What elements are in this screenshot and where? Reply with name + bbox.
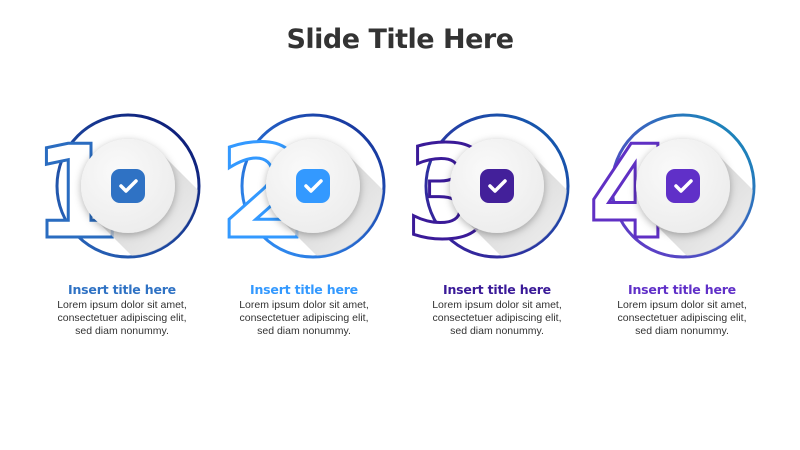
- item 2 graphic: 2: [219, 119, 308, 268]
- caption 2: consectetuer adipiscing elit,: [240, 312, 368, 324]
- caption 4: [617, 282, 747, 337]
- item 3 graphic: [412, 114, 570, 258]
- caption 4: Lorem ipsum dolor sit amet,: [617, 299, 747, 311]
- diagram: [44, 114, 756, 258]
- caption 1: consectetuer adipiscing elit,: [58, 312, 186, 324]
- caption 2: sed diam nonummy.: [257, 325, 351, 337]
- caption 1: sed diam nonummy.: [75, 325, 169, 337]
- caption 2: Lorem ipsum dolor sit amet,: [239, 299, 369, 311]
- title: Slide Title Here: [286, 24, 514, 55]
- caption 3: [432, 282, 562, 337]
- item 4 graphic: 4: [588, 119, 677, 268]
- caption 4: Insert title here: [628, 282, 736, 297]
- item 3 graphic: 3: [405, 119, 494, 268]
- item 2 graphic: [228, 114, 386, 258]
- caption 3: consectetuer adipiscing elit,: [432, 312, 562, 324]
- caption 1: Lorem ipsum dolor sit amet,: [57, 299, 187, 311]
- caption 2: Insert title here: [250, 282, 358, 297]
- caption 3: sed diam nonummy.: [450, 325, 544, 337]
- caption 1: Insert title here: [68, 282, 176, 297]
- caption 2: [239, 282, 369, 337]
- item 1 graphic: 1: [32, 119, 121, 268]
- caption 3: Insert title here: [443, 282, 551, 297]
- caption 4: consectetuer adipiscing elit,: [618, 312, 746, 324]
- caption 3: Lorem ipsum dolor sit amet,: [432, 299, 562, 311]
- item 4 graphic: [592, 114, 756, 258]
- caption 4: sed diam nonummy.: [635, 325, 729, 337]
- item 1 graphic: [44, 114, 200, 258]
- caption 1: [57, 282, 187, 337]
